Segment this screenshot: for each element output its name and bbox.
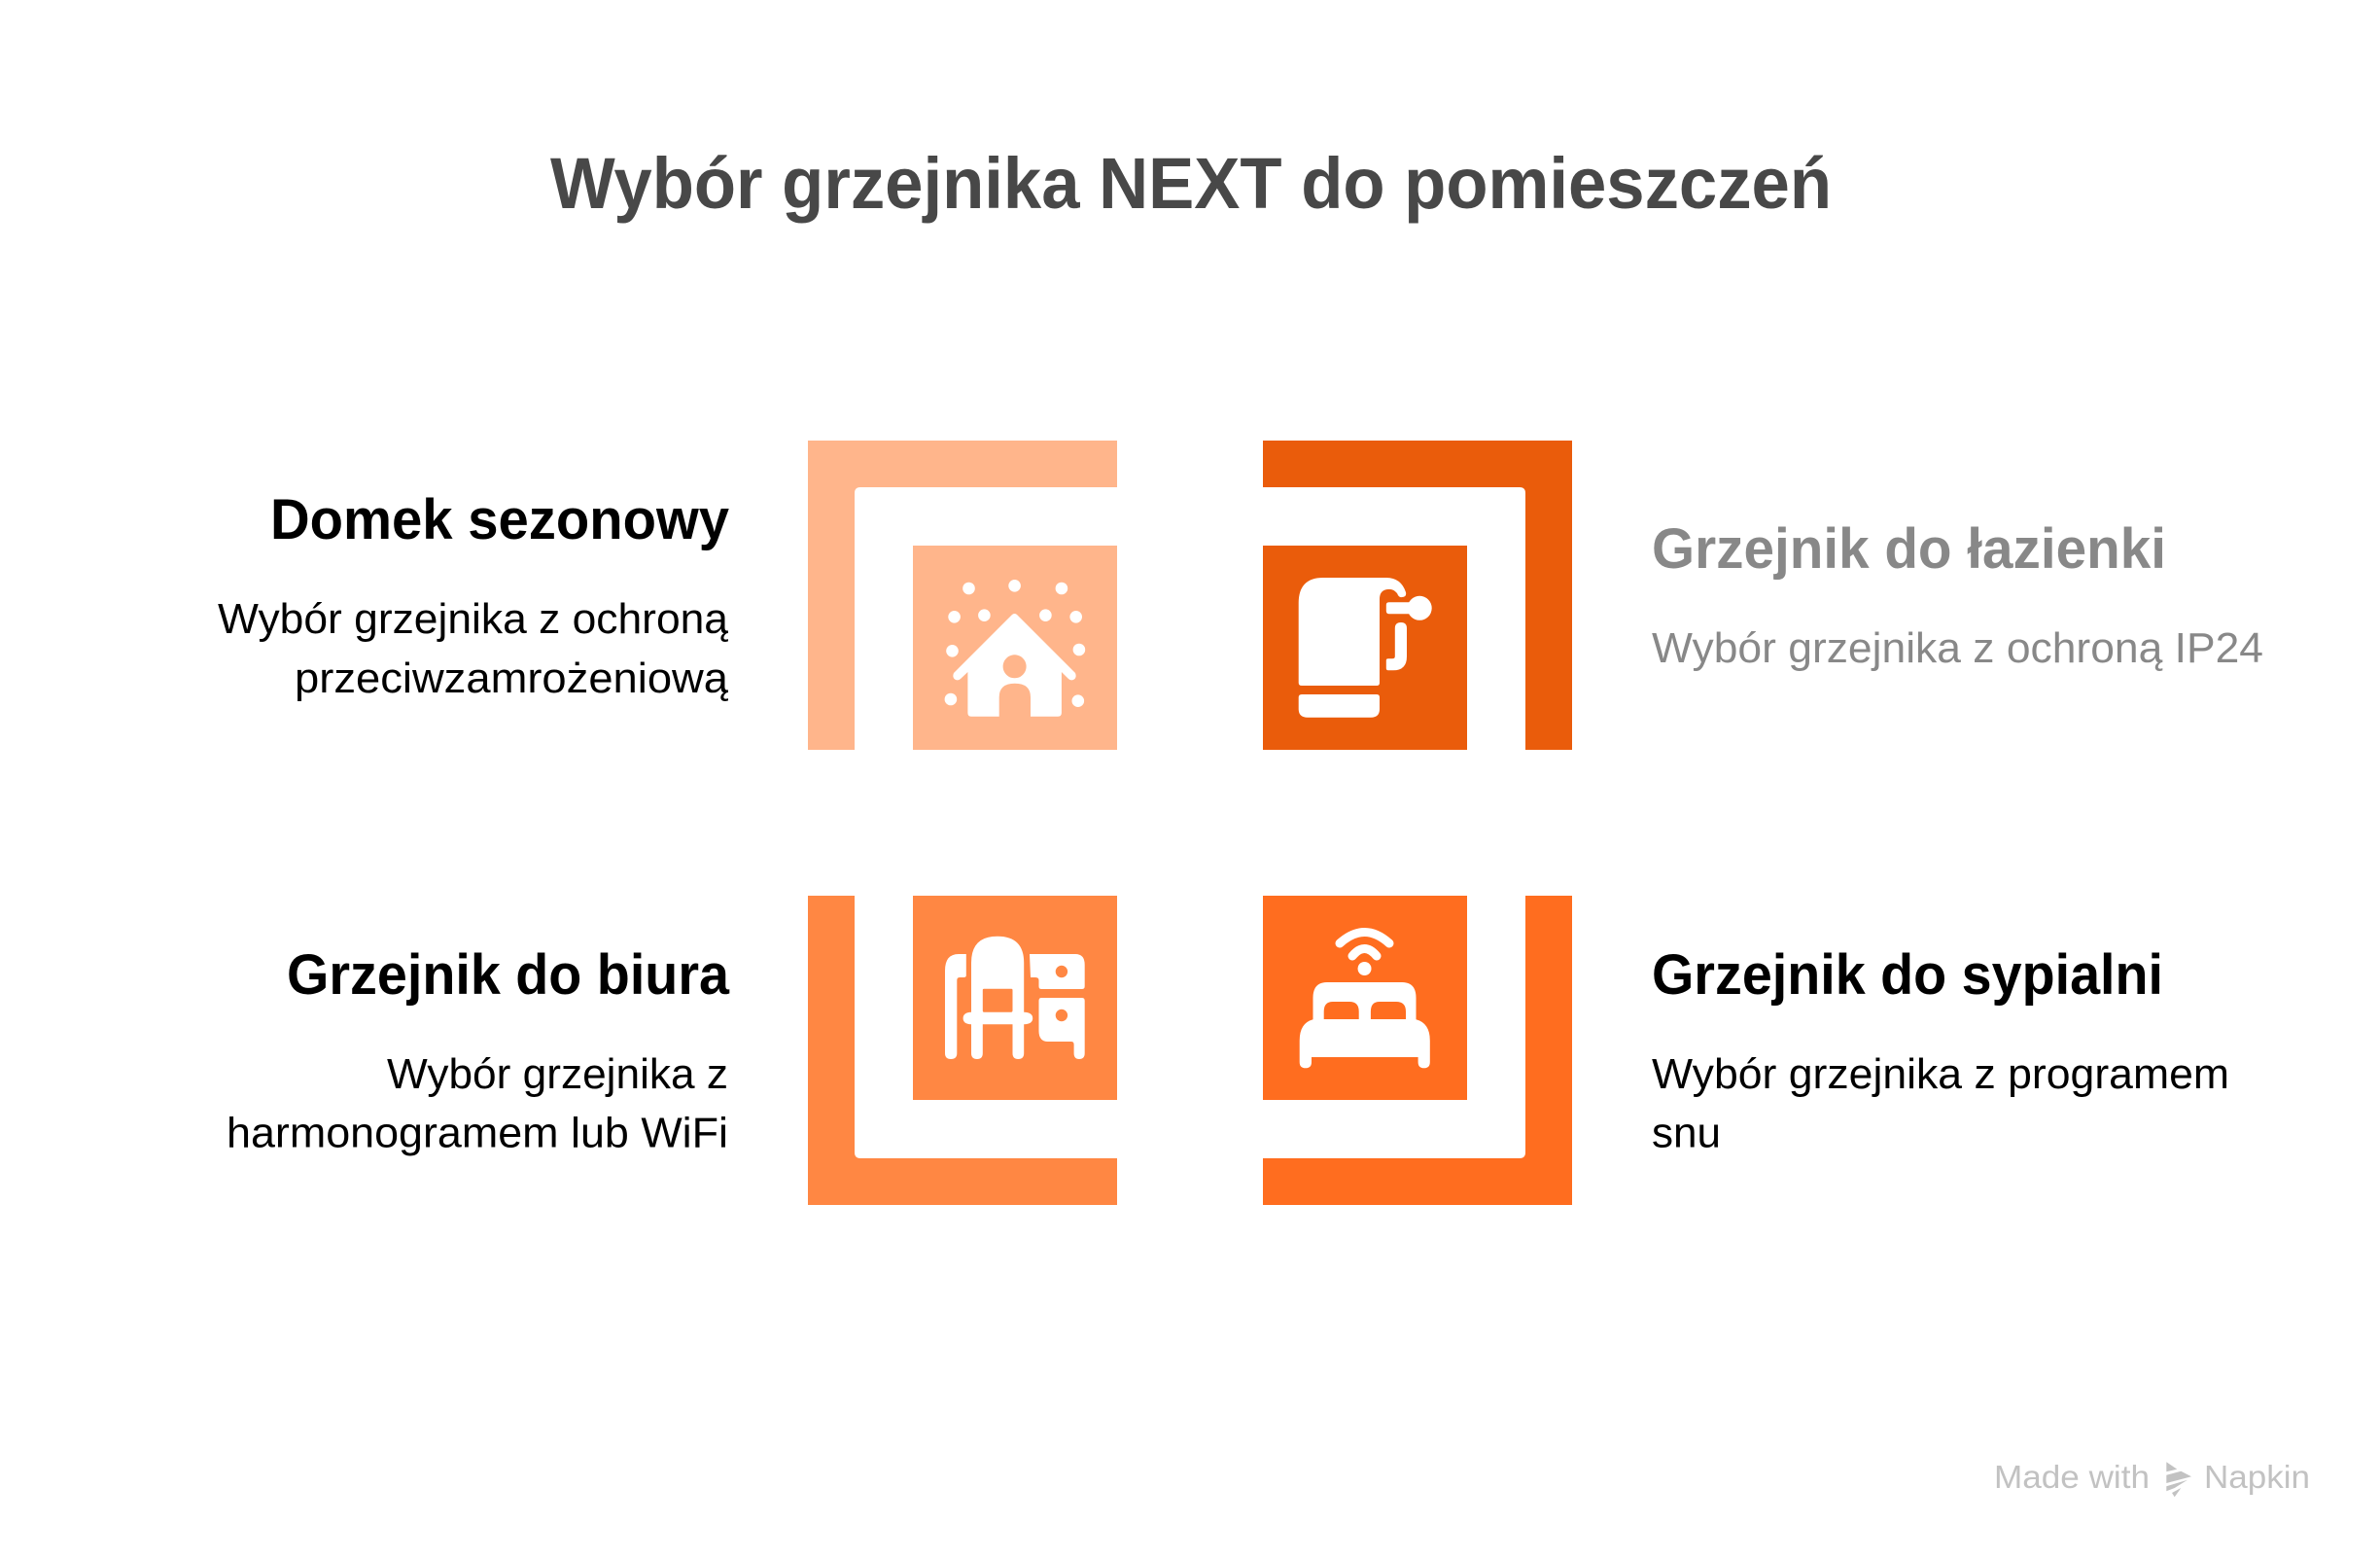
panel: Grzejnik do łazienki (1263, 441, 2263, 750)
icon tile: snowy house (913, 546, 1117, 750)
text block: sypialnia description: snu (1652, 1109, 1721, 1157)
corner frame: bottom-left (808, 896, 1117, 1205)
text block: sypialnia description (1652, 1050, 2229, 1157)
text block: Domek sezonowy description: przeciwzamrożeniową (295, 655, 729, 702)
text block: biuro description: harmonogramem lub WiFi (227, 1109, 728, 1157)
heading: Grzejnik do łazienki: Grzejnik do łazienki (1652, 517, 2166, 581)
icon: chair and drawers (945, 937, 1085, 1059)
panel: Grzejnik do sypialni (1263, 896, 2229, 1205)
title: Wybór grzejnika NEXT do pomieszczeń (550, 143, 1832, 224)
heading: Domek sezonowy: Domek sezonowy (270, 488, 729, 551)
icon: bed and wifi signal (1300, 932, 1430, 1068)
icon: towel and rail (1299, 578, 1432, 718)
icon tile: office furniture (913, 896, 1117, 1100)
footer: Made with Napkin: Napkin (2204, 1459, 2310, 1495)
corner frame: top-left (808, 441, 1117, 750)
text block: Domek sezonowy description: Wybór grzejnika z ochroną (218, 595, 729, 643)
footer: Made with Napkin (1994, 1459, 2310, 1497)
icon: house with snow (945, 580, 1085, 717)
heading: Grzejnik do biura: Grzejnik do biura (287, 943, 730, 1007)
text block: sypialnia description: Wybór grzejnika z programem (1652, 1050, 2229, 1098)
icon tile: towel rail (1263, 546, 1467, 750)
text block: biuro description (227, 1050, 728, 1157)
corner frame: bottom-right (1263, 896, 1572, 1205)
corner frame: top-right (1263, 441, 1572, 750)
icon: Napkin logo (2166, 1462, 2191, 1497)
text block: łazienka description: Wybór grzejnika z ochroną IP24 (1652, 624, 2263, 672)
panel: Domek sezonowy (218, 441, 1117, 750)
footer: Made with Napkin: Made with (1994, 1459, 2150, 1495)
icon tile: bed with wifi (1263, 896, 1467, 1100)
text block: biuro description: Wybór grzejnika z (387, 1050, 728, 1098)
text block: Domek sezonowy description (218, 595, 729, 702)
panel: Grzejnik do biura (227, 896, 1117, 1205)
heading: Grzejnik do sypialni: Grzejnik do sypialni (1652, 943, 2163, 1007)
